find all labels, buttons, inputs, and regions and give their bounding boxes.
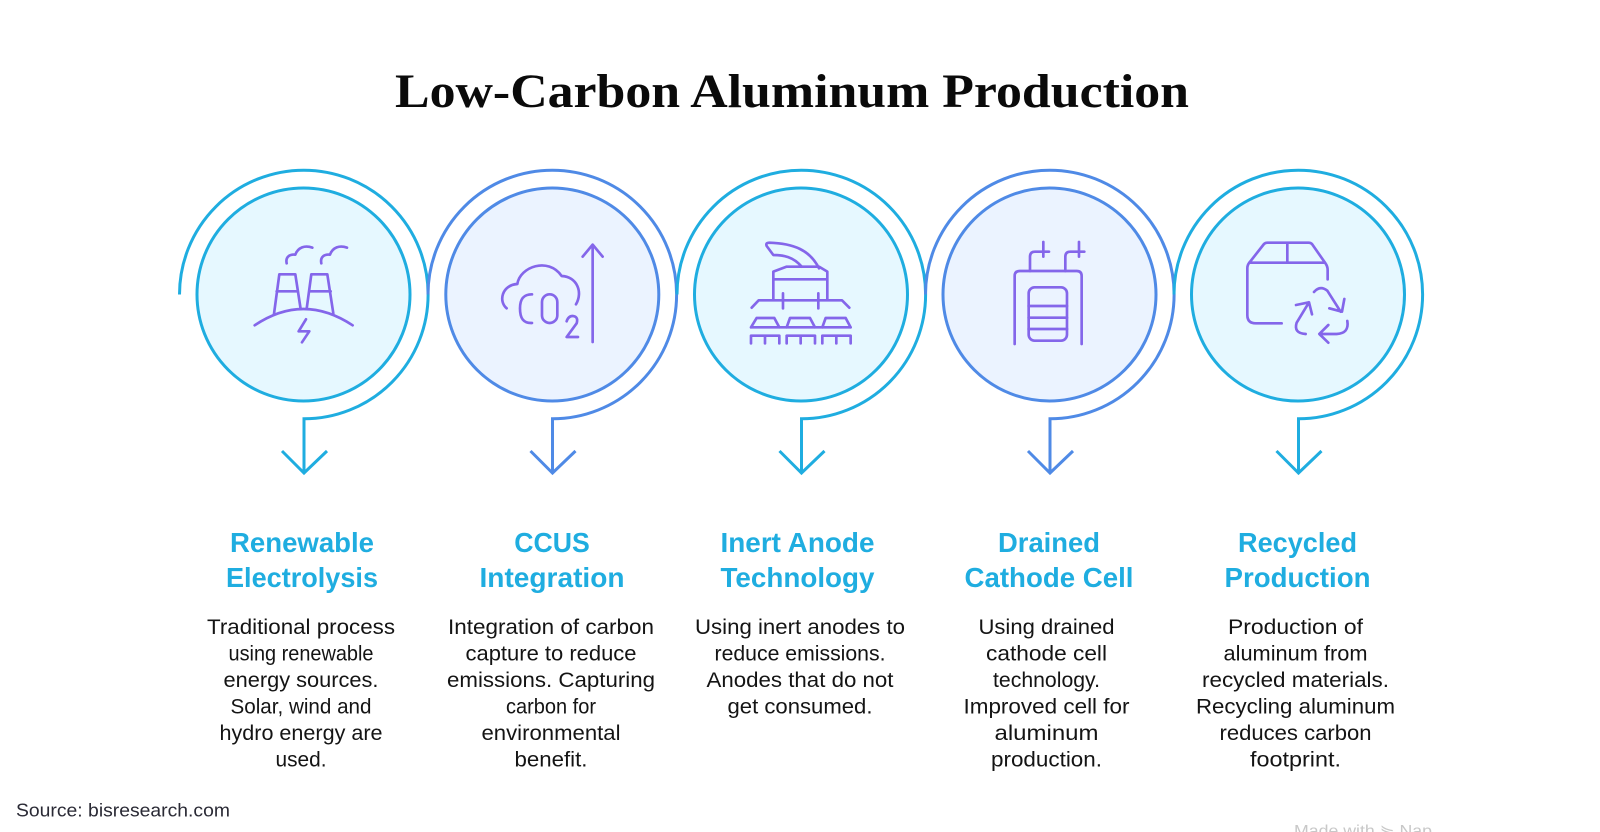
heading: Recycled Production: Recycled — [1238, 527, 1357, 558]
icon: CO2 cloud with arrow — [502, 245, 603, 342]
text: CCUS Integration description: emissions. Capturing — [447, 669, 655, 692]
heading: Renewable Electrolysis: Electrolysis — [226, 562, 378, 593]
text: Renewable Electrolysis description: energy sources. — [224, 669, 378, 692]
text: Recycled Production description: reduces carbon — [1220, 722, 1372, 745]
title: Low-Carbon Aluminum Production — [395, 65, 1189, 118]
text: Recycled Production description — [1196, 616, 1395, 772]
text: Renewable Electrolysis description: hydro energy are — [220, 722, 382, 745]
text: Inert Anode Technology description — [695, 616, 905, 718]
heading: Drained Cathode Cell: Drained — [998, 527, 1100, 558]
heading: Inert Anode Technology: Technology — [720, 562, 875, 593]
text: Renewable Electrolysis description: used. — [276, 748, 326, 772]
step 3 circle: inert anode technology — [677, 170, 926, 473]
step 2 circle: CCUS integration — [428, 170, 677, 473]
text: Renewable Electrolysis description: using renewable — [228, 642, 374, 666]
text: Renewable Electrolysis description: Solar, wind and — [230, 696, 372, 718]
text: CCUS Integration description: benefit. — [514, 748, 588, 772]
heading: Drained Cathode Cell: Cathode Cell — [964, 562, 1134, 593]
text: Inert Anode Technology description: Using inert anodes to — [695, 616, 905, 639]
step 4 circle: drained cathode cell — [926, 170, 1174, 473]
heading: CCUS Integration — [480, 527, 624, 593]
heading: Drained Cathode Cell — [964, 527, 1134, 593]
heading: Recycled Production — [1224, 527, 1370, 593]
text: Drained Cathode Cell description: cathode cell — [986, 642, 1107, 666]
text: Inert Anode Technology description: reduce emissions. — [714, 642, 886, 666]
heading: CCUS Integration: Integration — [480, 562, 624, 593]
text: Renewable Electrolysis description: Traditional process — [207, 616, 395, 639]
text: Drained Cathode Cell description: production. — [991, 748, 1102, 772]
icon: anode cell — [751, 243, 851, 343]
heading: Inert Anode Technology — [720, 527, 875, 593]
text: Drained Cathode Cell description: aluminum — [994, 722, 1098, 745]
text: Inert Anode Technology description: Anodes that do not — [706, 669, 894, 692]
text: CCUS Integration description: environmental — [482, 722, 620, 745]
step 1 circle: renewable electrolysis — [180, 170, 428, 473]
text: Drained Cathode Cell description — [964, 616, 1130, 772]
text: Drained Cathode Cell description: Improved cell for — [964, 696, 1130, 718]
text: Renewable Electrolysis description — [207, 616, 395, 772]
heading: Renewable Electrolysis — [226, 527, 378, 593]
text: Recycled Production description: aluminum from — [1224, 642, 1368, 666]
heading: Inert Anode Technology: Inert Anode — [720, 527, 874, 558]
text: Recycled Production description: footprint. — [1250, 748, 1341, 772]
text: CCUS Integration description: carbon for — [506, 696, 596, 718]
text: CCUS Integration description — [447, 616, 655, 772]
icon: box with recycling arrows — [1247, 243, 1348, 343]
text: Drained Cathode Cell description: Using drained — [978, 616, 1114, 639]
heading: CCUS Integration: CCUS — [514, 527, 590, 558]
heading: Recycled Production: Production — [1224, 562, 1370, 593]
text: Inert Anode Technology description: get consumed. — [728, 696, 872, 718]
text: Recycled Production description: Production of — [1228, 616, 1363, 639]
icon: cathode cell — [1015, 242, 1084, 344]
icon: power plant — [255, 247, 353, 342]
step 5 circle: recycled production — [1174, 170, 1423, 473]
text: Recycled Production description: Recycling aluminum — [1196, 696, 1395, 718]
source note: Source: bisresearch.com — [16, 800, 230, 820]
text: Recycled Production description: recycled materials. — [1202, 669, 1389, 692]
heading: Renewable Electrolysis: Renewable — [230, 527, 374, 558]
text: Drained Cathode Cell description: technology. — [993, 669, 1100, 692]
text: CCUS Integration description: capture to reduce — [466, 642, 636, 666]
text: CCUS Integration description: Integration of carbon — [448, 616, 654, 639]
